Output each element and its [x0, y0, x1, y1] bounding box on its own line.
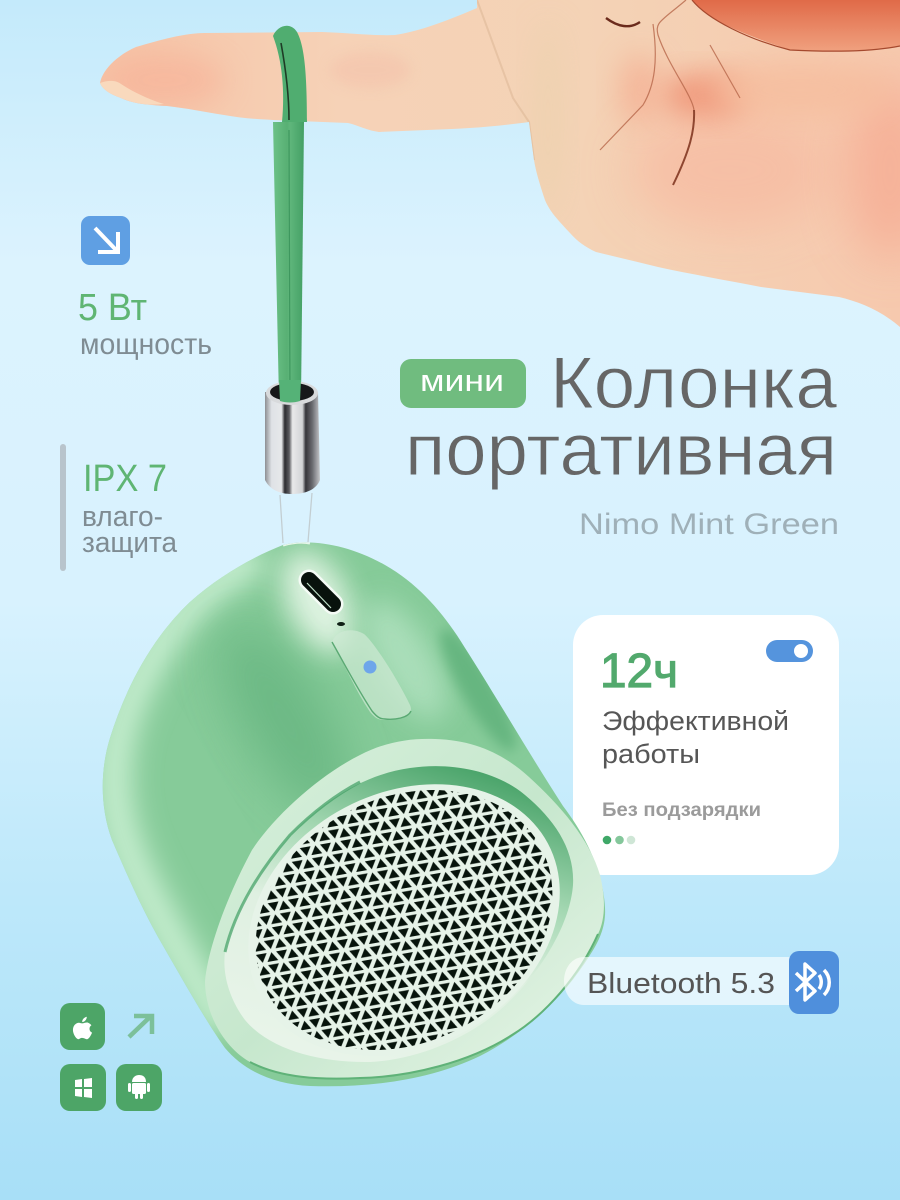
- card description: работы: [602, 739, 700, 769]
- ipx caption: влаго-: [82, 501, 163, 533]
- bottom edge shading: [250, 934, 598, 1079]
- toggle: [766, 640, 813, 662]
- icon: apple: [60, 1003, 105, 1050]
- title: портативная: [405, 410, 837, 491]
- ipx caption: защита: [82, 527, 178, 559]
- strap: [273, 26, 307, 400]
- blue led: [364, 660, 376, 674]
- title: Колонка: [550, 343, 837, 424]
- hand holding strap: [100, 0, 900, 327]
- nail: [100, 81, 164, 105]
- compatibility icons: [60, 1003, 162, 1111]
- mini badge: мини: [420, 363, 504, 398]
- power button: [332, 630, 411, 720]
- usb-c port: [307, 580, 333, 608]
- model name: Nimo Mint Green: [579, 508, 839, 541]
- card description: Эффективной: [602, 706, 789, 736]
- pagination dots: [603, 836, 635, 844]
- icon: android: [116, 1064, 162, 1111]
- led slit: [337, 622, 345, 626]
- threads: [280, 493, 312, 543]
- icon: arrow down-right: [81, 216, 130, 265]
- metal cylinder clasp: [265, 380, 320, 543]
- hours value: 12ч: [600, 645, 678, 698]
- water protection stat: [60, 444, 178, 571]
- creases: [600, 0, 740, 150]
- bluetooth label: [564, 957, 800, 1005]
- front rim: [205, 739, 604, 1079]
- speaker: [103, 539, 608, 1109]
- inner ring: [224, 766, 573, 1062]
- mini badge: [400, 359, 526, 408]
- info card: 12 hours: [573, 615, 839, 875]
- card note: Без подзарядки: [602, 800, 761, 821]
- icon: diagonal arrow: [129, 1016, 152, 1037]
- power value: 5 Вт: [78, 287, 147, 329]
- speaker grille: [256, 784, 560, 1050]
- power caption: мощность: [80, 328, 212, 361]
- bluetooth label: Bluetooth 5.3: [587, 968, 775, 1000]
- icon: bluetooth: [789, 951, 839, 1014]
- speaker body: [103, 539, 605, 1086]
- power stat: [78, 216, 212, 361]
- icon: windows: [60, 1064, 106, 1111]
- ipx value: IPX 7: [83, 458, 167, 500]
